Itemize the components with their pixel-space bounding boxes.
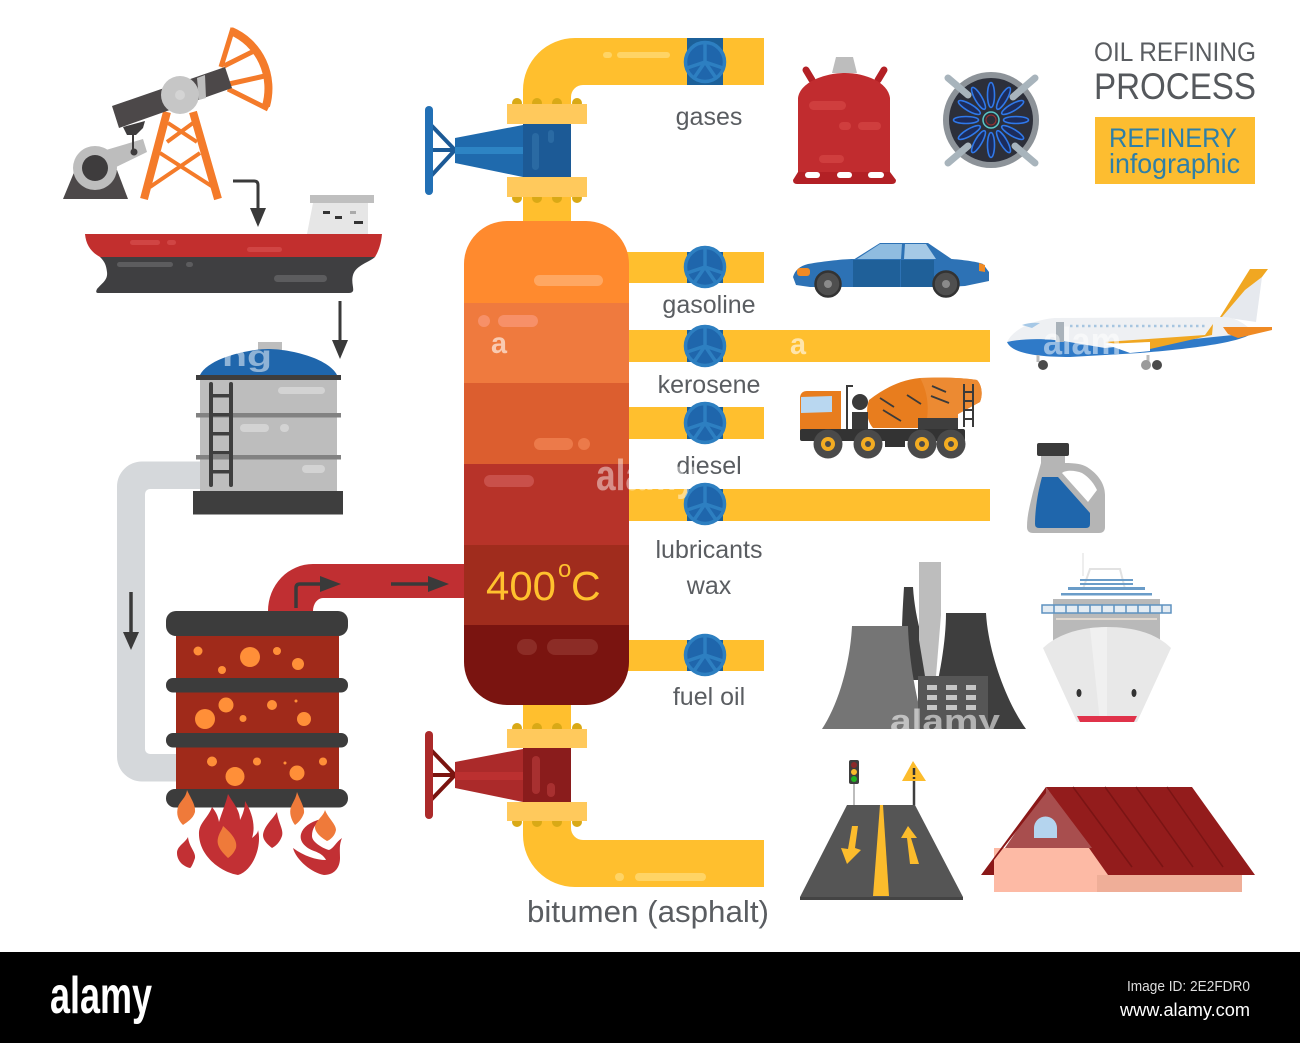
icon: storage tank: ng	[222, 340, 272, 373]
label: bitumen: bitumen (asphalt)	[527, 894, 769, 929]
arrow: down the grey pipe	[123, 592, 139, 650]
title: PROCESS	[1094, 66, 1256, 107]
icon: furnace barrel	[166, 611, 348, 808]
icon: cruise ship	[1042, 553, 1171, 722]
icon: concrete mixer truck	[800, 378, 982, 458]
icon: airplane: alam	[1043, 321, 1121, 363]
footer bar	[0, 952, 1300, 1043]
arrow: pump to ship	[233, 181, 266, 227]
icon: power plant	[822, 562, 1026, 739]
label: lubricants: lubricants	[656, 536, 762, 564]
title: OIL REFINING	[1094, 37, 1256, 67]
pipe: storage tank to furnace	[117, 461, 200, 782]
pipe: top gases elbow	[507, 38, 764, 225]
title	[1094, 37, 1256, 107]
icon: flames	[177, 790, 342, 875]
icon: gas cylinder	[793, 57, 896, 184]
watermark fragments: a	[491, 327, 507, 360]
icon: car	[793, 243, 989, 296]
icon: gas burner	[943, 72, 1039, 168]
footer image id: Image ID: 2E2FDR0	[1127, 978, 1250, 995]
label: wax: wax	[686, 572, 732, 600]
footer url: www.alamy.com	[1119, 1000, 1250, 1020]
distillation column	[464, 221, 629, 705]
label: fuel oil: fuel oil	[673, 683, 745, 711]
icon: power plant: alamy	[890, 703, 1000, 739]
pipe: furnace to column	[268, 564, 470, 613]
footer logo: alamy	[50, 967, 152, 1025]
arrow: furnace outlet bend	[296, 576, 341, 608]
icon: red bottom valve	[425, 731, 571, 819]
watermark fragments: alamy	[596, 451, 696, 500]
watermark fragments: a	[790, 328, 806, 361]
icon: blue top valve	[425, 106, 571, 195]
label: gases: gases	[676, 103, 742, 131]
watermark fragments	[491, 327, 806, 500]
icon: tanker ship	[85, 195, 382, 293]
temperature label: o	[558, 556, 571, 583]
pipes: side product lines	[620, 252, 990, 671]
label: kerosene: kerosene	[658, 371, 760, 399]
icon: road with signs	[800, 760, 963, 900]
arrow: ship to storage tank	[332, 301, 348, 359]
arrow: into column	[391, 576, 449, 592]
badge: refinery infographic	[1095, 117, 1255, 184]
icon: house	[981, 787, 1255, 892]
icon: oil jug	[1027, 443, 1105, 533]
icon: storage tank	[193, 340, 343, 514]
pipe: bottom bitumen elbow	[507, 700, 764, 887]
label: diesel: diesel	[676, 452, 742, 480]
temperature label	[486, 556, 601, 609]
badge: refinery infographic: REFINERY	[1109, 123, 1237, 153]
temperature label: C	[571, 563, 601, 609]
temperature label: 400	[486, 563, 556, 609]
icon: pump jack	[63, 28, 269, 199]
valve wheels	[686, 38, 724, 674]
label: gasoline: gasoline	[662, 291, 756, 319]
icon: airplane	[1007, 269, 1272, 370]
badge: refinery infographic: infographic	[1109, 148, 1240, 179]
